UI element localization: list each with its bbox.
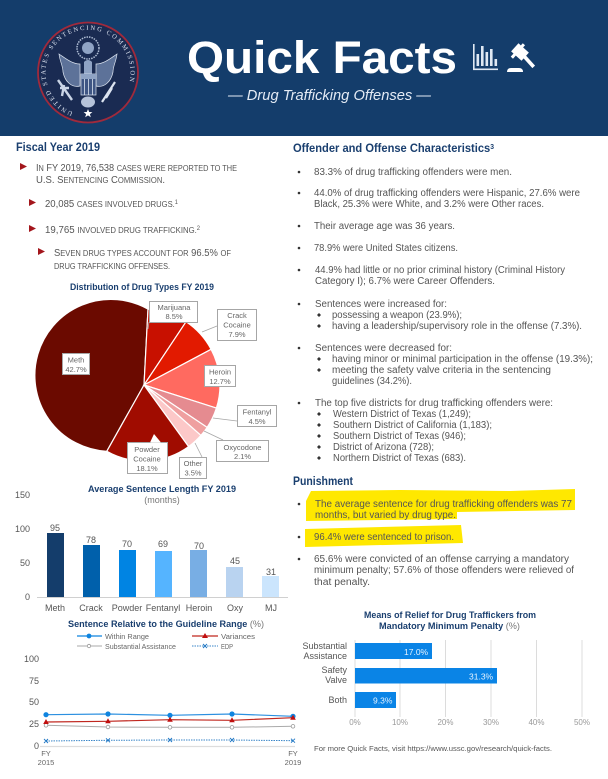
- text: seven drug types: DRUG TRAFFICKING OFFENSES.: [54, 262, 170, 271]
- label: meth: [62, 354, 90, 374]
- series: substantial assistance: [44, 724, 295, 729]
- line chart: sentence relative to guideline range: [24, 619, 301, 767]
- footer note: For more Quick Facts, visit https://www.ussc.gov/research/quick-facts.: [314, 744, 552, 753]
- label: marijuana: 8.5%: [165, 312, 183, 321]
- text: race: Black, 25.3% were White, and 3.2% were Other races.: [314, 199, 544, 210]
- chart title: Mandatory Minimum Penalty (%): [379, 621, 520, 632]
- axis labels: 10%: [392, 718, 408, 727]
- text: top five districts: The top five districts for drug trafficking offenders were:: [315, 398, 553, 409]
- label: oxycodone: Oxycodone: [224, 443, 261, 452]
- text: top five districts: [315, 398, 553, 464]
- icon: bar chart: [473, 44, 498, 70]
- label: fentanyl: Fentanyl: [243, 408, 272, 416]
- y axis labels: 25: [29, 719, 39, 729]
- label: powder cocaine: 18.1%: [136, 464, 158, 473]
- label: powder cocaine: Cocaine: [133, 454, 161, 464]
- series: within range: [43, 711, 296, 719]
- category labels: Crack: [79, 603, 103, 613]
- header banner: [0, 0, 608, 136]
- text: cases reported: U.S. SENTENCING COMMISSION.: [36, 175, 165, 186]
- label: crack cocaine: Crack: [227, 311, 247, 320]
- label: other: 3.5%: [184, 468, 202, 478]
- panel: offender and offense characteristics: [293, 143, 593, 464]
- bars: [47, 533, 279, 597]
- text: sentences increased: having a leadership/supervisory role in the offense (7.3%).: [332, 321, 582, 332]
- chart title: Sentence Relative to the Guideline Range (%): [68, 619, 264, 630]
- value labels: 70: [194, 541, 204, 551]
- axis labels: 0%: [349, 718, 361, 727]
- icon: commission seal: UNITED STATES SENTENCING COMMISSION: [41, 25, 135, 116]
- bullets: [298, 171, 321, 460]
- axis labels: 40%: [528, 718, 545, 727]
- text: sentences increased: Sentences were increased for:: [315, 299, 447, 310]
- text: criminal history: 44.9% had little or no prior criminal history (Criminal History: [315, 265, 565, 276]
- category labels: MJ: [265, 603, 277, 613]
- x axis labels: 2019: [285, 758, 301, 767]
- y axis labels: 100: [15, 524, 30, 534]
- axis labels: 50%: [574, 718, 590, 727]
- label: other: [180, 443, 206, 478]
- x axis labels: FY: [288, 749, 298, 758]
- y axis labels: 50: [29, 697, 39, 707]
- text: involved trafficking: 19,765 INVOLVED DRUG TRAFFICKING.: [45, 225, 201, 236]
- pie slices: [35, 299, 220, 461]
- legend: EDP: [221, 642, 233, 651]
- text: mandatory minimum: that penalty.: [314, 577, 370, 588]
- text: average sentence: months, but varied by drug type.: [315, 510, 456, 521]
- text: cases reported: [36, 163, 237, 186]
- category labels: [45, 603, 277, 613]
- label: fentanyl: [213, 406, 276, 426]
- label: heroin: [204, 366, 236, 386]
- value labels: 78: [86, 535, 96, 545]
- category labels: Safety: [321, 665, 347, 675]
- value labels: 95: [50, 523, 60, 533]
- label: crack cocaine: [202, 310, 256, 340]
- category labels: Fentanyl: [146, 603, 180, 613]
- text: sentences decreased: [315, 343, 593, 387]
- text: criminal history: Category I); 6.7% were Career Offenders.: [315, 276, 495, 287]
- text: average sentence: [315, 499, 572, 521]
- bar chart: average sentence length: [15, 484, 288, 613]
- label: crack cocaine: Cocaine: [223, 320, 251, 330]
- text: cases involved drugs: 20,085 CASES INVOLVED DRUGS.: [45, 199, 179, 210]
- text: top five districts: Western District of Texas (1,249);: [333, 409, 471, 420]
- heading: fiscal year: Fiscal Year 2019: [16, 142, 100, 154]
- bar values: 17.0%: [404, 647, 429, 657]
- text: seven drug types: [54, 248, 231, 271]
- text: sentences decreased: meeting the safety valve criteria in the sentencing: [332, 365, 551, 376]
- text: cases involved drugs: 1: [175, 200, 179, 206]
- bar values: 9.3%: [373, 696, 393, 706]
- text: mandatory minimum: [314, 554, 574, 588]
- category labels: Valve: [325, 675, 347, 685]
- text: involved trafficking: 2: [197, 226, 201, 232]
- label: oxycodone: [204, 431, 268, 462]
- series: EDP: [44, 738, 295, 743]
- text: criminal history: [315, 265, 565, 287]
- text: race: 44.0% of drug trafficking offenders were Hispanic, 27.6% were: [314, 188, 580, 199]
- text: mandatory minimum: 65.6% were convicted of an offense carrying a mandatory: [314, 554, 569, 565]
- axis labels: 30%: [483, 718, 499, 727]
- heading: characteristics: 3: [490, 144, 494, 151]
- text: mandatory minimum: minimum penalty; 57.6% of those offenders were relieved of: [314, 565, 574, 576]
- chart title: [364, 610, 536, 632]
- text: top five districts: Southern District of Texas (946);: [333, 431, 466, 442]
- text: sentences decreased: guidelines (34.2%).: [332, 376, 412, 387]
- subtitle: — Drug Trafficking Offenses —: [227, 88, 432, 104]
- label: meth: 42.7%: [65, 365, 87, 374]
- value labels: 31: [266, 567, 276, 577]
- chart title: Means of Relief for Drug Traffickers from: [364, 610, 536, 621]
- heading: characteristics: Offender and Offense Characteristics: [293, 143, 497, 155]
- value labels: 70: [122, 539, 132, 549]
- text: age: Their average age was 36 years.: [314, 221, 455, 232]
- y axis labels: 0: [25, 592, 30, 602]
- category labels: Powder: [112, 603, 142, 613]
- text: top five districts: Northern District of Texas (683).: [333, 453, 466, 464]
- category labels: Assistance: [303, 651, 347, 661]
- text: prison: 96.4% were sentenced to prison.: [314, 532, 454, 543]
- pie chart: distribution of drug types: [35, 282, 276, 478]
- value labels: 45: [230, 556, 240, 566]
- chart subtitle: (months): [144, 495, 180, 505]
- text: race: [314, 188, 580, 210]
- category labels: Heroin: [186, 603, 212, 613]
- arrow bullets: [20, 163, 45, 255]
- highlight: yellow marker: [305, 489, 575, 547]
- text: top five districts: Southern District of California (1,183);: [333, 420, 492, 431]
- y axis labels: 100: [24, 654, 39, 664]
- x axis labels: FY: [41, 749, 51, 758]
- title: Quick Facts: [187, 32, 457, 83]
- category labels: Substantial: [302, 641, 347, 651]
- value labels: 69: [158, 539, 168, 549]
- category labels: Both: [328, 695, 347, 705]
- label: marijuana: Marijuana: [158, 303, 191, 312]
- text: sentences decreased: having minor or minimal participation in the offense (19.3%);: [332, 354, 593, 365]
- bullets: [298, 503, 300, 560]
- bars: [355, 643, 497, 708]
- bar values: [373, 647, 494, 706]
- chart title: Average Sentence Length FY 2019: [88, 484, 236, 495]
- text: gender: 83.3% of drug trafficking offenders were men.: [314, 167, 512, 178]
- text: average sentence: The average sentence for drug trafficking offenders was 77: [315, 499, 572, 510]
- label: fentanyl: 4.5%: [248, 417, 266, 426]
- x axis labels: [38, 749, 301, 767]
- text: cases reported: IN FY 2019, 76,538 CASES WERE REPORTED TO THE: [36, 163, 237, 174]
- series: variances: [43, 715, 296, 724]
- y axis labels: [15, 490, 30, 602]
- legend: Substantial Assistance: [105, 642, 176, 651]
- text: seven drug types: SEVEN DRUG TYPES ACCOUNT FOR 96.5% OF: [54, 248, 231, 259]
- y axis labels: 50: [20, 558, 30, 568]
- axis labels: 20%: [437, 718, 454, 727]
- category labels: [302, 641, 347, 705]
- x axis labels: 2015: [38, 758, 54, 767]
- icon: gavel: [507, 43, 535, 72]
- legend: [77, 632, 255, 651]
- label: powder cocaine: [128, 434, 168, 474]
- legend: Within Range: [105, 632, 149, 641]
- chart title: Distribution of Drug Types FY 2019: [70, 282, 214, 293]
- heading: punishment: Punishment: [293, 476, 353, 488]
- bar chart: means of relief: [302, 610, 590, 727]
- panel: fiscal year: [16, 142, 237, 271]
- label: crack cocaine: 7.9%: [228, 330, 246, 339]
- label: marijuana: [148, 302, 198, 329]
- y axis labels: 75: [29, 676, 39, 686]
- legend: Variances: [221, 632, 255, 641]
- category labels: Meth: [45, 603, 65, 613]
- label: heroin: 12.7%: [209, 377, 231, 386]
- text: sentences decreased: Sentences were decreased for:: [315, 343, 452, 354]
- label: meth: Meth: [68, 356, 84, 364]
- y axis labels: [24, 654, 39, 751]
- axis labels: [349, 718, 590, 727]
- text: citizenship: 78.9% were United States citizens.: [314, 243, 458, 254]
- text: sentences increased: possessing a weapon (23.9%);: [332, 310, 462, 321]
- label: other: Other: [184, 459, 203, 468]
- text: top five districts: District of Arizona (728);: [333, 442, 434, 453]
- text: sentences increased: [315, 299, 582, 332]
- value labels: [50, 523, 276, 577]
- category labels: Oxy: [227, 603, 243, 613]
- label: heroin: Heroin: [209, 368, 231, 376]
- y axis labels: 150: [15, 490, 30, 500]
- label: powder cocaine: Powder: [134, 445, 160, 454]
- label: oxycodone: 2.1%: [234, 452, 251, 461]
- y axis labels: 0: [34, 741, 39, 751]
- bar values: 31.3%: [469, 672, 494, 682]
- panel: punishment: [293, 476, 575, 588]
